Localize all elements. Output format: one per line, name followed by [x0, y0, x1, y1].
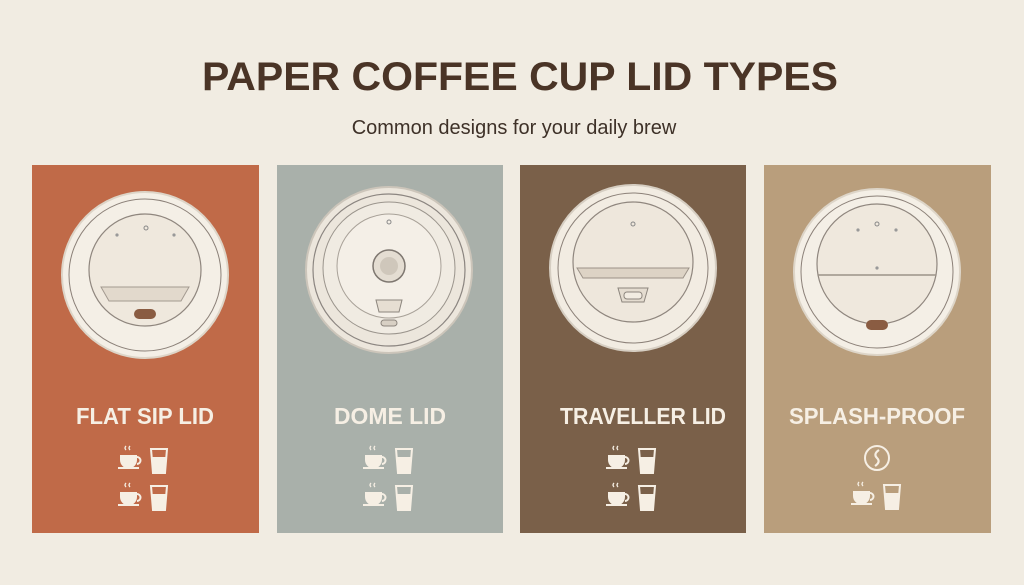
icon: splash [865, 446, 889, 470]
icons [363, 446, 412, 510]
panel: dome lid [277, 165, 503, 533]
icon: splash-proof lid [794, 189, 960, 355]
subtitle: Common designs for your daily brew [352, 117, 677, 139]
label: FLAT SIP LID [76, 403, 214, 429]
title: PAPER COFFEE CUP LID TYPES [202, 55, 838, 99]
icons [851, 482, 900, 509]
panel: flat sip lid [32, 165, 259, 533]
label: DOME LID [334, 403, 446, 429]
icon: dome lid [306, 187, 472, 353]
panel: splash-proof [764, 165, 991, 533]
label: SPLASH-PROOF [789, 403, 965, 429]
panel: traveller lid [520, 165, 746, 533]
icon: flat lid [62, 192, 228, 358]
label: TRAVELLER LID [560, 403, 726, 429]
icon: traveller lid [550, 185, 716, 351]
icons [606, 446, 655, 510]
icons [118, 446, 167, 510]
